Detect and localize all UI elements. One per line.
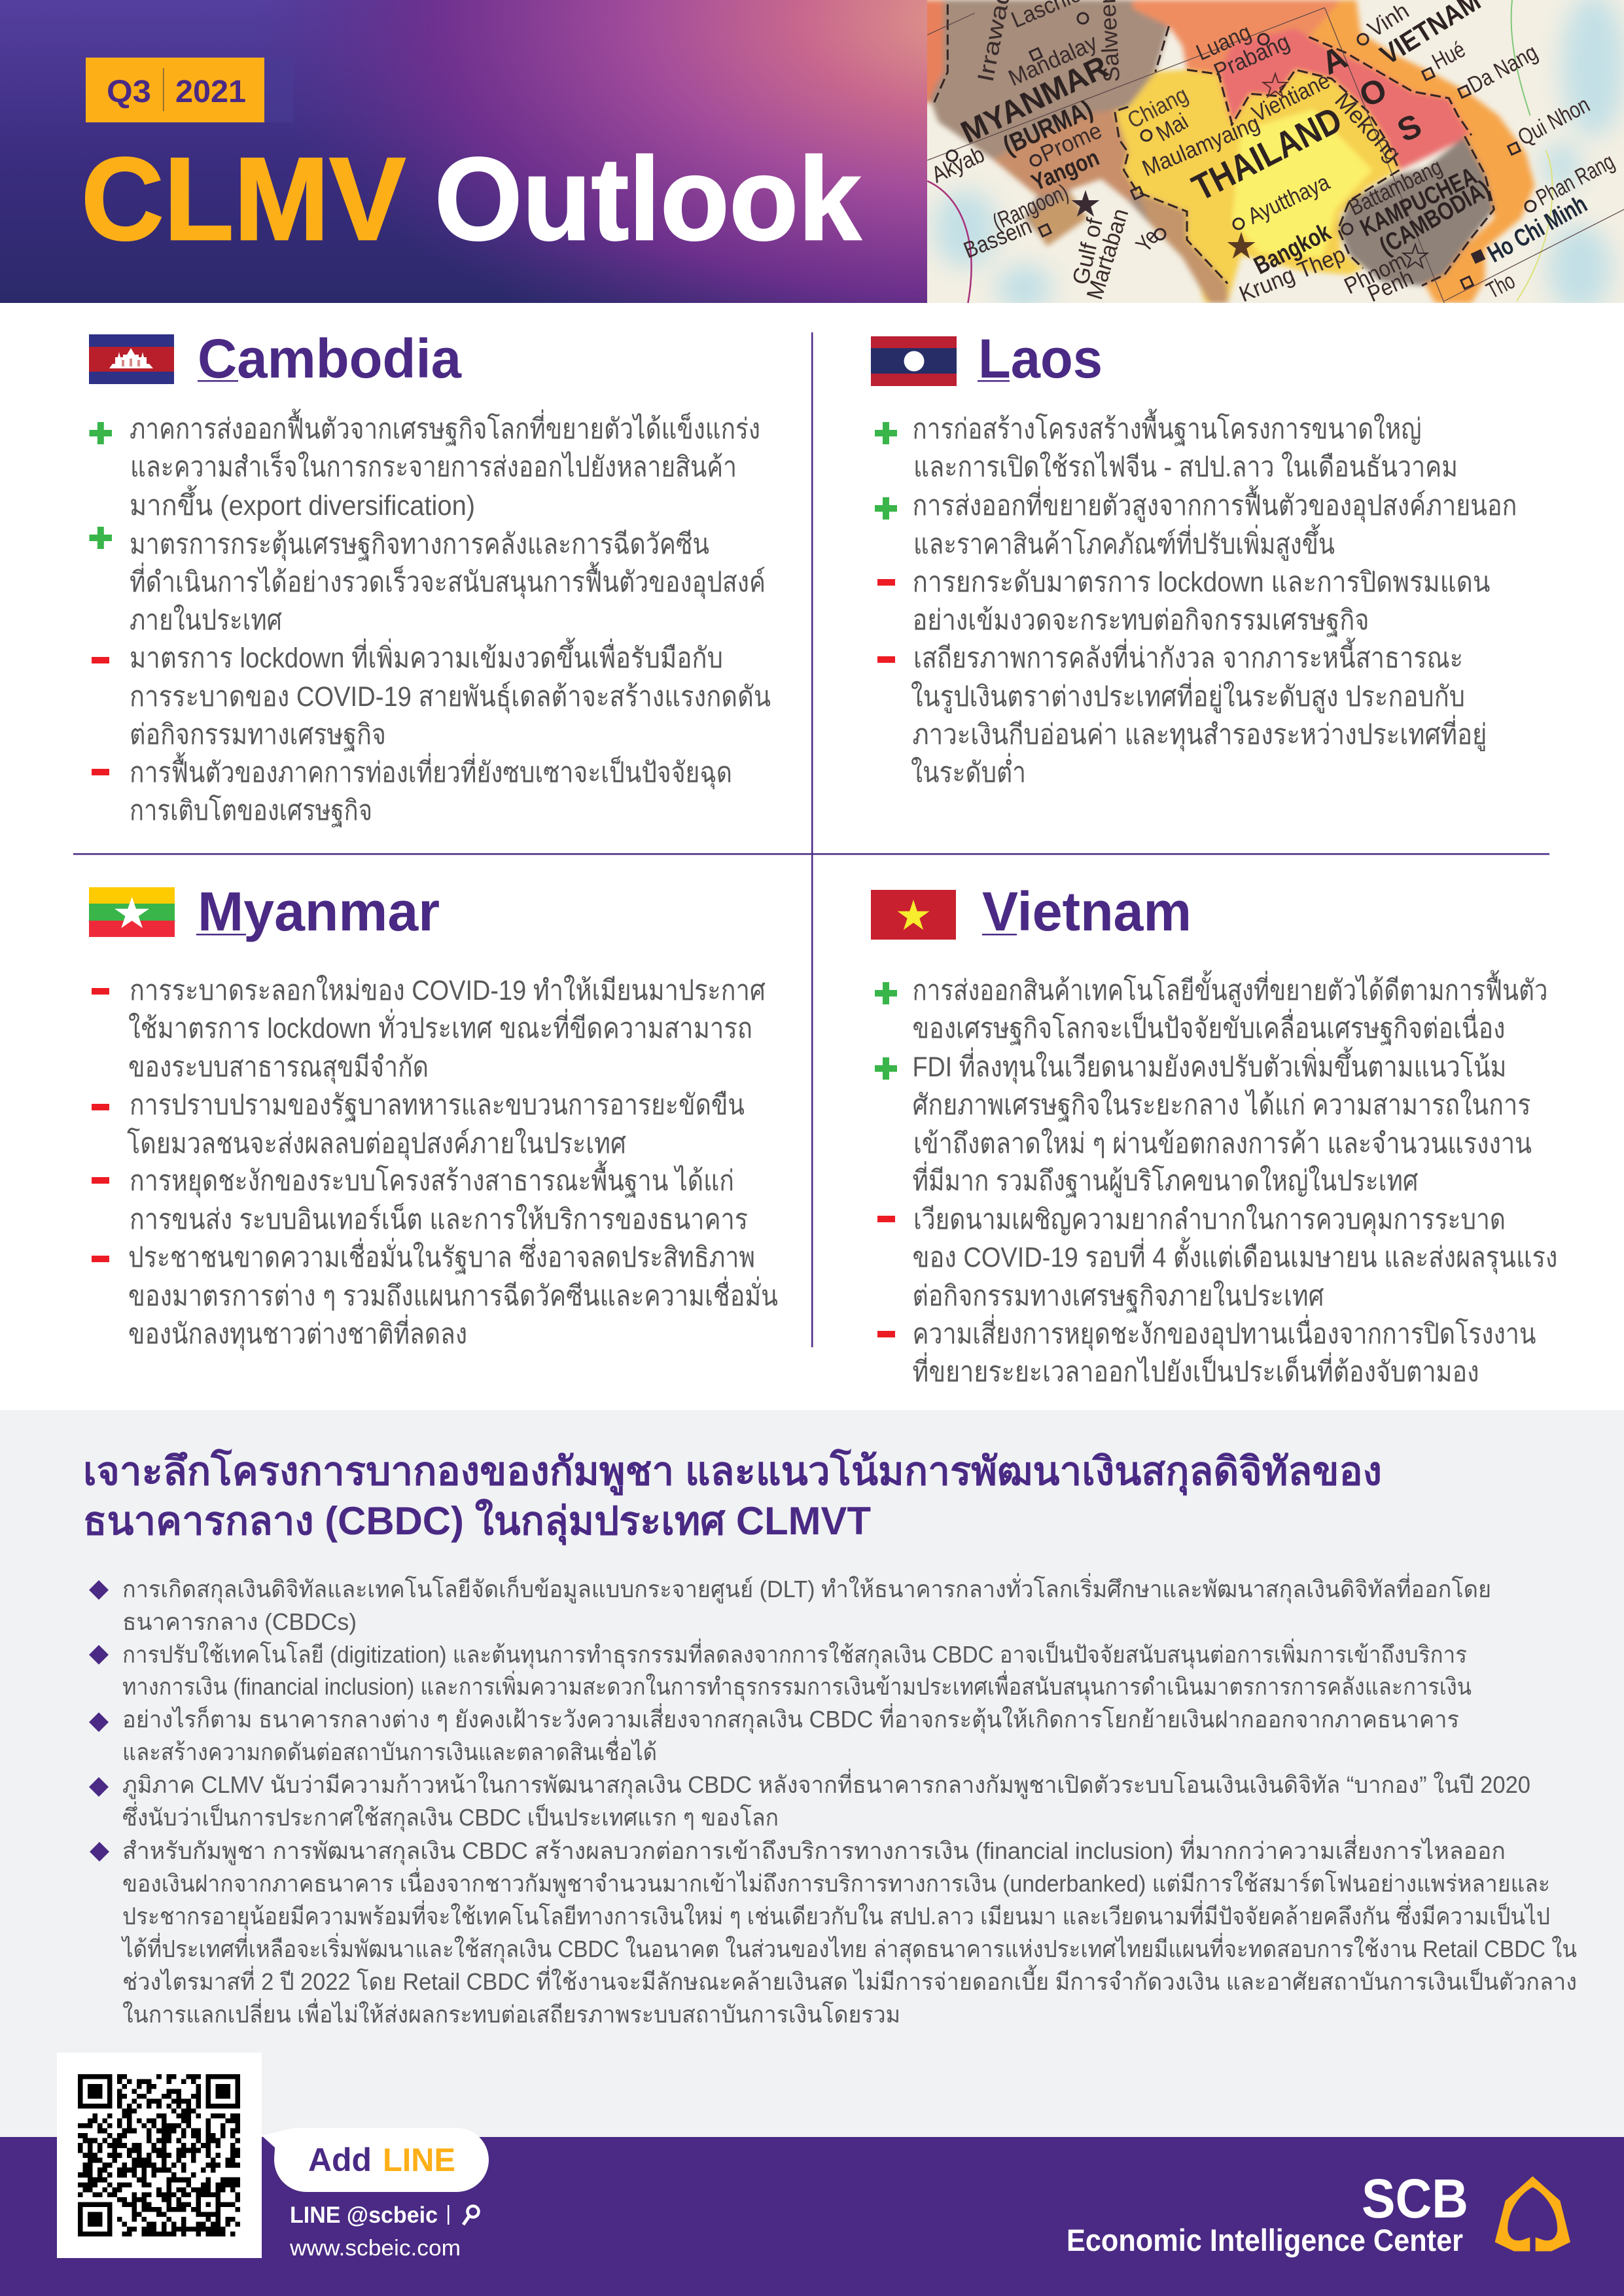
bullet: export recovery: และความสำเร็จในการกระจายการส่งออกไปยังหลายสินค้า <box>130 450 737 483</box>
panel: Cambodia <box>89 328 771 827</box>
bullet: deposit flight risk: อย่างไรก็ตาม ธนาคารกลางต่าง ๆ ยังคงเฝ้าระวังความเสี่ยงจากสกุลเงิน CBDC ที่อาจกระตุ้นให้เกิดการโยกย้ายเงินฝากออกจากภาคธนาคาร <box>122 1703 1459 1734</box>
bullet: lockdown <box>92 637 771 751</box>
panel: Vietnam <box>871 881 1557 1388</box>
map place labels: Bangkok <box>1250 219 1335 280</box>
bullet: crackdown <box>92 1089 745 1161</box>
map place labels: Prabang <box>1210 29 1294 84</box>
panel: CBDC deep dive <box>0 1410 1624 2137</box>
icon: search <box>463 2206 479 2225</box>
bullet: fourth COVID wave: ต่อกิจกรรมทางเศรษฐกิจภายในประเทศ <box>912 1280 1324 1313</box>
map photo of mainland Southeast Asia <box>916 0 1624 312</box>
bullet: digital currency and DLT <box>89 1573 1491 1635</box>
bullet: confidence <box>92 1238 778 1351</box>
SCB wordmark: Economic Intelligence Center <box>1067 2223 1463 2257</box>
panel: Laos <box>871 328 1517 788</box>
LINE contact details: LINE @scbeic <box>290 2202 438 2228</box>
bullet: export recovery: ภาคการส่งออกฟื้นตัวจากเศรษฐกิจโลกที่ขยายตัวได้แข็งแกร่ง <box>130 408 760 446</box>
map place labels: Gulf of <box>1068 215 1108 287</box>
bullet: COVID outbreak: การระบาดระลอกใหม่ของ COVID-19 ทำให้เมียนมาประกาศ <box>130 974 766 1006</box>
heading: CBDC deep dive: ธนาคารกลาง (CBDC) ในกลุ่มประเทศ CLMVT <box>83 1498 871 1545</box>
map place labels: Da Nang <box>1464 39 1542 98</box>
title <box>81 133 862 265</box>
header banner <box>0 0 927 303</box>
heading: Laos: Laos <box>978 328 1103 389</box>
title: Outlook <box>434 133 862 265</box>
bullet: COVID outbreak: ใช้มาตรการ lockdown ทั่วประเทศ ขณะที่ขีดความสามารถ <box>128 1009 752 1044</box>
map place labels: Mai <box>1152 109 1192 147</box>
bullet: export recovery <box>89 408 760 521</box>
bullet: confidence: ของมาตรการต่าง ๆ รวมถึงแผนการฉีดวัคซีนและความเชื่อมั่น <box>128 1277 778 1312</box>
map place labels: Maulamyaing <box>1139 111 1263 181</box>
map place labels: Tho <box>1482 268 1519 304</box>
flag: Myanmar <box>89 887 175 937</box>
heading: CBDC deep dive <box>83 1448 1382 1545</box>
map place labels: Ye <box>1131 224 1164 257</box>
bullet: lockdown and border closure: การยกระดับมาตรการ lockdown และการปิดพรมแดน <box>912 567 1491 598</box>
flag: Laos <box>871 336 957 386</box>
bullet: crackdown: โดยมวลชนจะส่งผลลบต่ออุปสงค์ภายในประเทศ <box>127 1127 626 1161</box>
map place labels: A <box>1316 39 1352 82</box>
bullet: fiscal stability: ในระดับต่ำ <box>911 753 1026 788</box>
icon: SCB logo <box>1495 2176 1570 2252</box>
QR code <box>57 2053 262 2258</box>
bullet: digitization and financial inclusion: การปรับใช้เทคโนโลยี (digitization) และต้นทุนการทำธุรกรรมที่ลดลงจากการใช้สกุลเงิน CBDC อาจเป็นปัจจัยสนับสนุนต่อการเพิ่มการเข้าถึงบริการ <box>122 1638 1467 1669</box>
map city markers <box>947 13 1536 289</box>
bullet: crackdown: การปราบปรามของรัฐบาลทหารและขบวนการอารยะขัดขืน <box>130 1089 745 1122</box>
quarter badge: 2021 <box>175 75 246 109</box>
bullet: fiscal stimulus and vaccination <box>89 527 766 636</box>
bullet: fiscal stability: เสถียรภาพการคลังที่น่ากังวล จากภาระหนี้สาธารณะ <box>913 637 1463 674</box>
bullet: digitization and financial inclusion: ทางการเงิน (financial inclusion) และการเพิ่มความสะดวกในการทำธุรกรรมการเงินข้ามประเทศเพื่อสนับสนุนการดำเนินมาตรการการคลังและการเงิน <box>122 1670 1472 1701</box>
bullet: export recovery: มากขึ้น (export diversification) <box>130 485 475 521</box>
map place labels: Mandalay <box>1004 29 1101 91</box>
bullet: exports <box>875 485 1517 561</box>
map place labels: (Rangoon) <box>989 179 1072 235</box>
bullet: deposit flight risk <box>89 1703 1459 1765</box>
bullet: supply disruption <box>877 1315 1536 1388</box>
map place labels <box>928 0 1619 307</box>
heading: Vietnam: Vietnam <box>982 881 1192 942</box>
bullet: Cambodia and Thailand retail CBDC: ของเงินฝากจากภาคธนาคาร เนื่องจากชาวกัมพูชาจำนวนมากเข้าไม่ถึงการบริการทางการเงิน (underbanked) แต่มีการใช้สมาร์ตโฟนอย่างแพร่หลายและ <box>122 1867 1550 1898</box>
map place labels: Bassein <box>960 213 1035 263</box>
bullet: CLMV progress and Bakong: ภูมิภาค CLMV นับว่ามีความก้าวหน้าในการพัฒนาสกุลเงิน CBDC หลังจากที่ธนาคารกลางกัมพูชาเปิดตัวระบบโอนเงินเงินดิจิทัล “บากอง” ในปี 2020 <box>122 1769 1530 1799</box>
bullet: COVID outbreak <box>92 974 766 1084</box>
bullet: digital currency and DLT: การเกิดสกุลเงินดิจิทัลและเทคโนโลยีจัดเก็บข้อมูลแบบกระจายศูนย์ (DLT) ทำให้ธนาคารกลางทั่วโลกเริ่มศึกษาและพัฒนาสกุลเงินดิจิทัลที่ออกโดย <box>122 1573 1491 1604</box>
heading: CBDC deep dive: เจาะลึกโครงการบากองของกัมพูชา และแนวโน้มการพัฒนาเงินสกุลดิจิทัลของ <box>83 1448 1382 1496</box>
bullet: infrastructure disruption: การหยุดชะงักของระบบโครงสร้างสาธารณะพื้นฐาน ได้แก่ <box>130 1160 734 1198</box>
map place labels: Chiang <box>1123 82 1192 133</box>
bullet: infrastructure <box>875 408 1458 483</box>
map place labels: S <box>1392 107 1427 149</box>
bullet: CLMV progress and Bakong: ซึ่งนับว่าเป็นการประกาศใช้สกุลเงิน CBDC เป็นประเทศแรก ๆ ของโลก <box>122 1801 779 1832</box>
map place labels: (BURMA) <box>998 95 1097 160</box>
bullet: digital currency and DLT: ธนาคารกลาง (CBDCs) <box>122 1608 357 1635</box>
map place labels: Mekong <box>1330 88 1406 167</box>
bullet: confidence: ประชาชนขาดความเชื่อมั่นในรัฐบาล ซึ่งอาจลดประสิทธิภาพ <box>128 1238 755 1274</box>
bullet: FDI <box>875 1046 1532 1198</box>
bullet: Cambodia and Thailand retail CBDC: ช่วงไตรมาสที่ 2 ปี 2022 โดย Retail CBDC ที่ใช้งานจะมีลักษณะคล้ายเงินสด ไม่มีการจ่ายดอกเบี้ย มีการจำกัดวงเงิน และอาศัยสถาบันการเงินเป็นตัวกลาง <box>122 1964 1577 1995</box>
map place labels: (CAMBODIA) <box>1375 175 1494 260</box>
bullet: fiscal stability: ภาวะเงินกีบอ่อนค่า และทุนสำรองระหว่างประเทศที่อยู่ <box>912 715 1487 752</box>
map place labels: Yangon <box>1027 143 1103 196</box>
map place labels: THAILAND <box>1186 98 1349 209</box>
map place labels: Krung Thep <box>1235 241 1349 307</box>
Add LINE speech bubble: LINE <box>383 2142 455 2178</box>
Add LINE speech bubble <box>262 2128 489 2192</box>
bullet: Cambodia and Thailand retail CBDC: ในการแลกเปลี่ยน เพื่อไม่ให้ส่งผลกระทบต่อเสถียรภาพระบบสถาบันการเงินโดยรวม <box>122 1998 900 2028</box>
bullet: tourism <box>92 752 732 827</box>
bullet: fourth COVID wave: เวียดนามเผชิญความยากลำบากในการควบคุมการระบาด <box>913 1203 1506 1237</box>
quarter badge: Q3 <box>107 75 151 109</box>
map place labels: Ho Chi Minh <box>1483 190 1592 268</box>
bullet: infrastructure disruption: การขนส่ง ระบบอินเทอร์เน็ต และการให้บริการของธนาคาร <box>130 1203 748 1235</box>
LINE contact details: www.scbeic.com <box>289 2236 461 2261</box>
bullet: CLMV progress and Bakong <box>89 1769 1530 1832</box>
bullet: exports: และราคาสินค้าโภคภัณฑ์ที่ปรับเพิ่มสูงขึ้น <box>913 523 1335 561</box>
bullet: COVID outbreak: ของระบบสาธารณสุขมีจำกัด <box>128 1051 429 1084</box>
flag: Vietnam <box>871 890 956 940</box>
bullet: fiscal stimulus and vaccination: ที่ดำเนินการได้อย่างรวดเร็วจะสนับสนุนการฟื้นตัวของอุปสงค์ <box>130 561 766 599</box>
bullet: lockdown and border closure: อย่างเข้มงวดจะกระทบต่อกิจกรรมเศรษฐกิจ <box>912 605 1369 637</box>
bullet: Cambodia and Thailand retail CBDC: สำหรับกัมพูชา การพัฒนาสกุลเงิน CBDC สร้างผลบวกต่อการเข้าถึงบริการทางการเงิน (financial inclusion) ที่มากกว่าความเสี่ยงการไหลออก <box>122 1835 1506 1865</box>
bullet: high-tech exports <box>875 970 1548 1045</box>
bullet: tourism: การเติบโตของเศรษฐกิจ <box>130 794 372 827</box>
footer band <box>0 2137 1624 2296</box>
bullet: infrastructure: การก่อสร้างโครงสร้างพื้นฐานโครงการขนาดใหญ่ <box>912 408 1421 446</box>
map place labels: Martaban <box>1082 205 1133 302</box>
bullet: lockdown: ต่อกิจกรรมทางเศรษฐกิจ <box>130 719 386 751</box>
bullet: fiscal stimulus and vaccination: มาตรการกระตุ้นเศรษฐกิจทางการคลังและการฉีดวัคซีน <box>130 529 709 561</box>
bullet: high-tech exports: ของเศรษฐกิจโลกจะเป็นปัจจัยขับเคลื่อนเศรษฐกิจต่อเนื่อง <box>912 1009 1505 1045</box>
bullet: FDI: FDI ที่ลงทุนในเวียดนามยังคงปรับตัวเพิ่มขึ้นตามแนวโน้ม <box>912 1046 1506 1084</box>
map place labels: Vientiane <box>1248 67 1334 127</box>
map place labels: Qui Nhon <box>1513 92 1594 150</box>
Add LINE speech bubble: Add <box>308 2142 372 2178</box>
map place labels: Phnom <box>1340 247 1410 299</box>
bullet: infrastructure: และการเปิดใช้รถไฟจีน - สปป.ลาว ในเดือนธันวาคม <box>913 451 1458 483</box>
bullet: fourth COVID wave <box>877 1203 1557 1313</box>
map place labels: Prome <box>1036 118 1106 167</box>
flag: Cambodia <box>89 334 174 384</box>
panel dividers <box>73 332 1549 1347</box>
bullet: exports: การส่งออกที่ขยายตัวสูงจากการฟื้นตัวของอุปสงค์ภายนอก <box>912 485 1517 523</box>
bullet: Cambodia and Thailand retail CBDC: ประชากรอายุน้อยมีความพร้อมที่จะใช้เทคโนโลยีทางการเงินใหม่ ๆ เช่นเดียวกับใน สปป.ลาว เมียนมา และเวียดนามที่มีปัจจัยคล้ายคลึงกัน ซึ่งมีความเป็นไป <box>122 1900 1550 1931</box>
bullet: fourth COVID wave: ของ COVID-19 รอบที่ 4 ตั้งแต่เดือนเมษายน และส่งผลรุนแรง <box>912 1237 1557 1275</box>
bullet: confidence: ของนักลงทุนชาวต่างชาติที่ลดลง <box>128 1315 467 1351</box>
bullet: supply disruption: ที่ขยายระยะเวลาออกไปยังเป็นประเด็นที่ต้องจับตามอง <box>912 1352 1479 1388</box>
bullet: tourism: การฟื้นตัวของภาคการท่องเที่ยวที่ยังซบเซาจะเป็นปัจจัยฉุด <box>130 752 732 790</box>
map place labels: MYANMAR <box>956 50 1114 150</box>
LINE contact details <box>289 2202 479 2261</box>
map place labels: KAMPUCHEA <box>1356 162 1481 242</box>
bullet: fiscal stimulus and vaccination: ภายในประเทศ <box>130 604 282 636</box>
bullet: fiscal stability <box>877 637 1487 788</box>
SCB wordmark: SCB <box>1362 2168 1468 2229</box>
bullet: digitization and financial inclusion <box>89 1638 1472 1701</box>
map place labels: Akyab <box>928 141 989 188</box>
bullet: deposit flight risk: และสร้างความกดดันต่อสถาบันการเงินและตลาดสินเชื่อได้ <box>122 1736 657 1765</box>
map place labels: Hué <box>1428 37 1470 75</box>
map place labels: Ayutthaya <box>1244 169 1333 229</box>
bullet: fiscal stability: ในรูปเงินตราต่างประเทศที่อยู่ในระดับสูง ประกอบกับ <box>911 677 1465 714</box>
bullet: lockdown: การระบาดของ COVID-19 สายพันธุ์เดลต้าจะสร้างแรงกดดัน <box>130 681 771 714</box>
heading: Myanmar: Myanmar <box>198 881 440 942</box>
bullet: FDI: ที่มีมาก รวมถึงฐานผู้บริโภคขนาดใหญ่ในประเทศ <box>912 1161 1419 1198</box>
map place labels: Battambang <box>1345 154 1446 221</box>
map place labels: O <box>1354 71 1392 115</box>
bullet: Cambodia and Thailand retail CBDC <box>90 1835 1577 2028</box>
bullet: supply disruption: ความเสี่ยงการหยุดชะงักของอุปทานเนื่องจากการปิดโรงงาน <box>912 1315 1536 1351</box>
SCB wordmark <box>1067 2168 1468 2257</box>
panel: Myanmar <box>89 881 778 1351</box>
bullet: FDI: เข้าถึงตลาดใหม่ ๆ ผ่านข้อตกลงการค้า และจำนวนแรงงาน <box>913 1127 1532 1159</box>
bullet: infrastructure disruption <box>92 1160 748 1235</box>
bullet: lockdown: มาตรการ lockdown ที่เพิ่มความเข้มงวดขึ้นเพื่อรับมือกับ <box>130 637 723 674</box>
bullet: FDI: ศักยภาพเศรษฐกิจในระยะกลาง ได้แก่ ความสามารถในการ <box>912 1089 1531 1122</box>
quarter badge <box>86 58 293 122</box>
title: CLMV <box>81 133 406 265</box>
map place labels: Luang <box>1192 19 1255 65</box>
heading: Cambodia: Cambodia <box>198 328 462 389</box>
bullet: lockdown and border closure <box>877 567 1491 637</box>
map place labels: Penh <box>1364 264 1417 307</box>
